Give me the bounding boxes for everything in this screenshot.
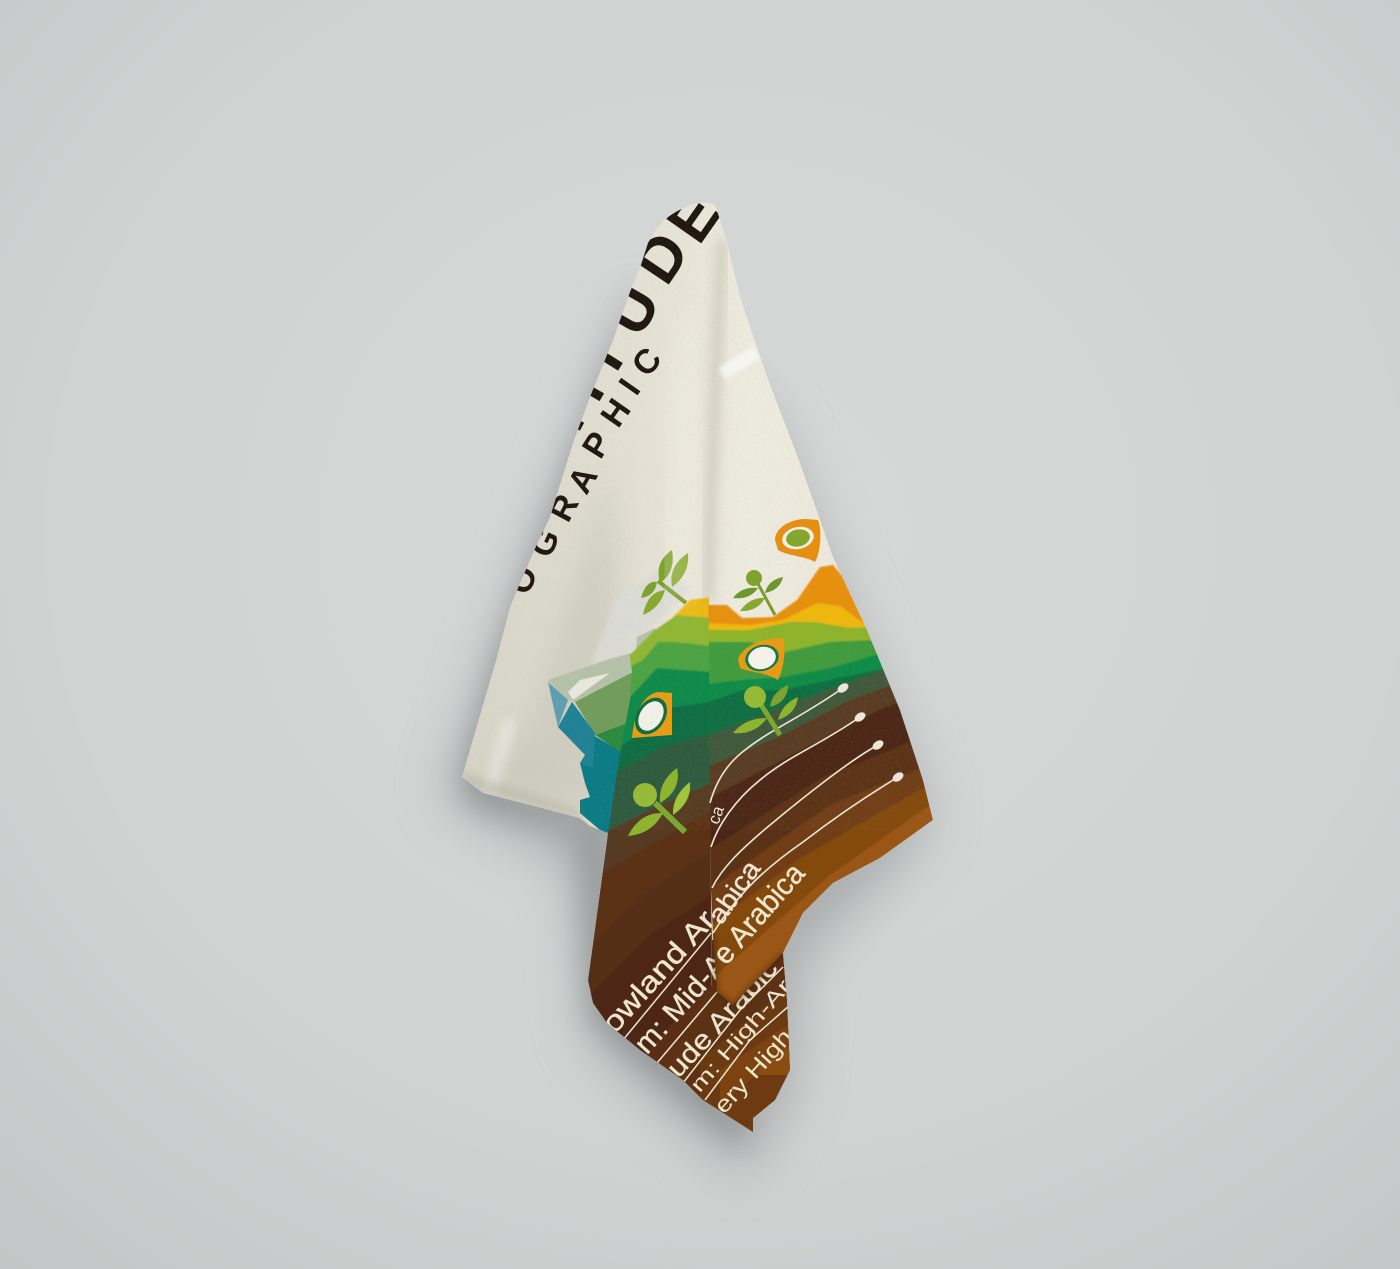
towel body — [462, 202, 933, 1132]
white notch — [568, 673, 610, 700]
leader lines below the flap — [623, 933, 790, 1100]
title: ALTITUDE: I — [569, 330, 637, 382]
grey shading on left cloth — [502, 516, 620, 810]
label text: Lowland Arabica: owland Ar — [596, 904, 722, 1040]
label: Very High: ery High — [709, 1024, 797, 1118]
subtitle: INFOGRAPHIC — [506, 348, 660, 623]
faded mountain ghost — [592, 573, 686, 664]
subtitle: INFOGRAPHIC: O — [500, 561, 546, 599]
plant 4 — [628, 768, 690, 836]
subtitle: INFOGRAPHIC: N — [462, 626, 506, 664]
subtitle: INFOGRAPHIC: F — [475, 598, 519, 632]
plant 2 — [733, 570, 783, 615]
label: e Arabica: e Arabica — [707, 857, 812, 971]
pin 2 — [738, 638, 784, 680]
panel: lower right strata with labels — [660, 940, 790, 1132]
subtitle: INFOGRAPHIC: P — [575, 425, 619, 465]
towel shadow on wall — [445, 270, 930, 1175]
title: ALTITUDE: I — [529, 393, 599, 441]
panel: left front strata — [585, 597, 712, 1140]
subtitle: INFOGRAPHIC: C — [625, 340, 669, 384]
plant 1 — [641, 550, 688, 615]
subtitle: INFOGRAPHIC: I — [612, 372, 648, 402]
label fragment: ca: ca — [704, 803, 728, 827]
panel: right front strata — [708, 564, 933, 1005]
cloth noise texture — [521, 205, 929, 830]
leader lines with bulbs — [710, 688, 898, 933]
teal river — [548, 682, 630, 840]
label text: Medium Mid-Altitude: m: Mid-A — [628, 947, 734, 1060]
flap shadow — [714, 935, 783, 1005]
subtitle: INFOGRAPHIC: A — [560, 460, 606, 500]
plant 3 — [733, 685, 798, 735]
title: ALTITUDE — [578, 203, 720, 431]
title: ALTITUDE: I — [550, 362, 618, 412]
fold shading — [462, 239, 760, 818]
subtitle: INFOGRAPHIC: H — [593, 392, 639, 434]
faded hill slope — [548, 628, 660, 702]
olive hill — [575, 672, 633, 735]
title: ALTITUDE: D — [621, 220, 703, 296]
label: High-Altitude Arabica: ude Arabic — [661, 953, 783, 1083]
panel: cream towel cloth — [450, 190, 950, 1150]
title: ALTITUDE: E — [654, 181, 734, 255]
label: Premium High-Altitude: m: High-Ar — [686, 975, 796, 1097]
pin 1 — [775, 519, 820, 562]
subtitle: INFOGRAPHIC: R — [541, 488, 587, 528]
subtitle: INFOGRAPHIC: G — [522, 523, 568, 563]
pin 3 — [632, 692, 672, 738]
label: abica: abica — [702, 854, 767, 929]
title: ALTITUDE: U — [592, 273, 674, 347]
line end bulbs — [836, 681, 905, 784]
